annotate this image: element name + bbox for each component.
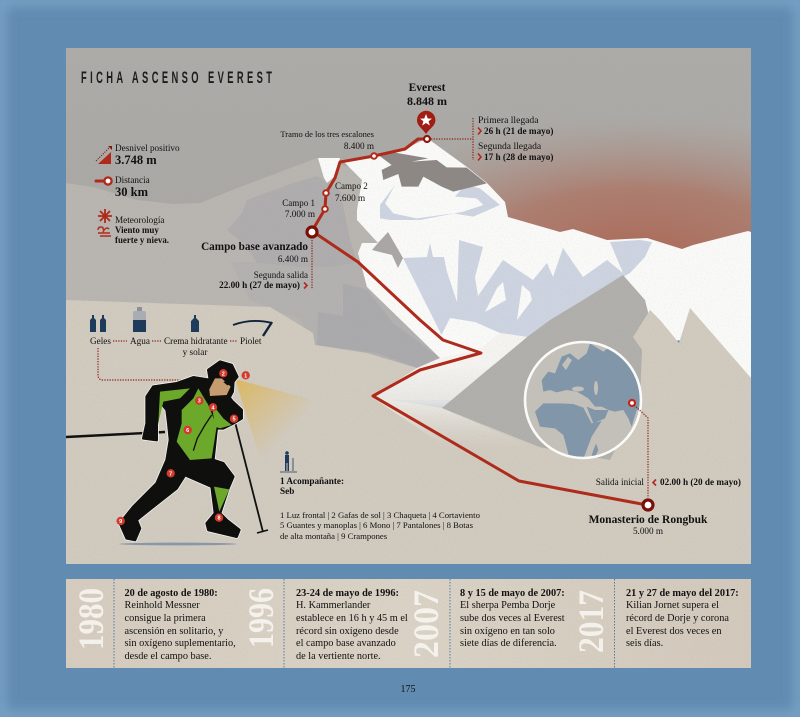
runner: [66, 362, 268, 545]
sky red glow: [462, 133, 751, 249]
entry: 2007: El sherpa Pemba Dorje: [460, 600, 556, 611]
page number: 175: [400, 684, 416, 695]
entry: 1996: H. Kammerlander: [296, 600, 371, 611]
entry: 2007: sube dos veces al Everest: [460, 613, 565, 624]
stat: distancia: 30 km: [115, 185, 149, 199]
entry: 1996: establece en 16 h y 45 m el: [296, 613, 408, 624]
entry: 2007: sin oxígeno en tan solo: [460, 626, 555, 637]
headlamp beam: [235, 379, 313, 467]
numbered markers: [116, 369, 250, 525]
rock between snow: [372, 232, 403, 268]
entry: 2017: 21 y 27 de mayo del 2017:: [626, 588, 739, 599]
stat: desnivel positivo: 3.748 m: [115, 153, 157, 167]
entry: 2017: récord de Dorje y corona: [626, 613, 729, 624]
icon: piolet: [233, 321, 272, 336]
runner shadow: [119, 543, 237, 545]
stat: meteorologia: [98, 209, 169, 245]
equipment list: Piolet: [240, 336, 262, 346]
label: Campo 1: 7.000 m: [285, 209, 315, 219]
numbered markers: 2: [222, 371, 225, 377]
entry: 1980: 20 de agosto de 1980:: [124, 588, 218, 599]
callout: llegadas: [431, 115, 553, 162]
icon: agua: [133, 307, 146, 332]
texture: [320, 141, 751, 426]
far ridge: [66, 158, 500, 400]
icon: acompanante: [280, 451, 297, 472]
label: acompanante: 1 Acompañante:: [280, 476, 344, 486]
label: tres escalones: [280, 129, 374, 151]
entry: 1996: el campo base avanzado: [296, 638, 396, 649]
equipment legend: 1 Luz frontal | 2 Gafas de sol | 3 Chaqueta | 4 Cortaviento: [280, 510, 481, 520]
label: Rongbuk: Monasterio de Rongbuk: [589, 514, 708, 526]
label: Campo base avanzado: Segunda salida: [254, 270, 308, 280]
label: Campo 1: [282, 198, 315, 219]
year: 2017: 2017: [571, 590, 611, 653]
year: 1980: 1980: [71, 588, 111, 650]
icon: snow and wind: [98, 209, 112, 236]
marker: campo base: [307, 227, 317, 237]
land: [535, 342, 647, 460]
face: [209, 378, 231, 396]
callout: salida inicial: 02.00 h (20 de mayo): [660, 477, 741, 487]
entry: 2007: siete días de diferencia.: [460, 638, 557, 649]
title: FICHA ASCENSO EVEREST: [81, 68, 275, 87]
summit dark rock: [378, 153, 487, 192]
entry: 1996: de la vertiente norte.: [296, 651, 381, 662]
right grey mountain: [442, 275, 650, 473]
numbered markers: 8: [217, 516, 221, 522]
stat: distancia: Distancia: [115, 175, 150, 185]
entry: 2007: [460, 588, 565, 649]
callout: salida inicial: [596, 477, 741, 487]
label: Campo 1: Campo 1: [282, 198, 315, 208]
label: Campo 2: [335, 181, 368, 203]
body: [120, 362, 242, 540]
label: Campo base avanzado: Campo base avanzado: [201, 241, 308, 253]
jacket: [158, 388, 232, 512]
snow fading into valley: [373, 333, 527, 435]
numbered markers: 5: [232, 417, 236, 423]
entry: 2017: el Everest dos veces en: [626, 626, 722, 637]
entry: 2017: seis días.: [626, 638, 663, 649]
mid mountain shadow: upper: [227, 176, 357, 267]
entry: 1980: Reinhold Messner: [124, 600, 200, 611]
stat: desnivel positivo: [96, 143, 180, 167]
sky: [66, 48, 751, 248]
callout: llegadas: 26 h (21 de mayo): [484, 126, 553, 136]
label: Campo base avanzado: 6.400 m: [278, 254, 308, 264]
equipment list: y solar: [183, 347, 207, 357]
camp marker: Campo 1: [322, 206, 328, 212]
callout: llegadas: Segunda llegada: [478, 141, 542, 152]
label: acompanante: [280, 476, 344, 496]
numbered markers: 1: [244, 373, 247, 379]
equipment list: Crema hidratante: [164, 336, 228, 346]
equipment legend: [280, 510, 481, 541]
pole: rear: [66, 432, 165, 437]
panel: timeline: [66, 579, 751, 668]
callout: llegadas: Primera llegada: [478, 115, 539, 126]
icon: summit pin: [417, 111, 435, 134]
camp marker: Campo 2: [323, 190, 329, 196]
numbered markers: 7: [169, 471, 172, 477]
globe: [525, 342, 648, 498]
label: Everest: [407, 82, 447, 108]
equipment legend: de alta montaña | 9 Crampones: [280, 531, 388, 541]
icon: geles: [90, 315, 106, 332]
entry: 1980: ascensión en solitario, y: [124, 626, 224, 637]
marker: Rongbuk: [643, 500, 653, 510]
year: 2007: 2007: [406, 590, 446, 658]
entry: 2017: [626, 588, 739, 649]
numbered markers: 4: [211, 405, 215, 411]
callout: llegadas: 17 h (28 de mayo): [484, 152, 553, 162]
stat: meteorologia: Viento muy: [115, 225, 159, 235]
entry: 1980: desde el campo base.: [124, 651, 211, 662]
marker: tres escalones: [371, 153, 377, 159]
route line: [307, 136, 653, 510]
equipment list: Agua: [130, 336, 150, 346]
label: Rongbuk: [589, 514, 708, 536]
entry: 2017: Kilian Jornet supera el: [626, 600, 719, 611]
entry: 1996: récord sin oxígeno desde: [296, 626, 399, 637]
snow field: [318, 138, 751, 380]
label: Campo 2: 7.600 m: [335, 193, 365, 203]
marker: cumbre: [424, 136, 430, 142]
numbered markers: 9: [119, 519, 122, 525]
pole: front: [235, 422, 268, 533]
label: tres escalones: Tramo de los tres escalones: [280, 129, 374, 139]
entry: 1980: sin oxígeno suplementario,: [124, 638, 236, 649]
icon: slope: [96, 146, 112, 164]
entry: 2007: 8 y 15 de mayo de 2007:: [460, 588, 565, 599]
label: acompanante: Seb: [280, 486, 294, 496]
ground: [66, 300, 751, 564]
label: Campo base avanzado: [201, 240, 312, 290]
equipment legend: 5 Guantes y manoplas | 6 Mono | 7 Pantalones | 8 Botas: [280, 520, 474, 530]
icon: crema: [191, 315, 199, 332]
snow shadows: [380, 185, 652, 350]
label: Everest: 8.848 m: [407, 94, 447, 108]
Everest location marker: [629, 400, 635, 406]
entry: 1980: [124, 588, 236, 662]
callout: salida inicial: Salida inicial: [596, 477, 644, 487]
label: Campo 2: Campo 2: [335, 181, 368, 191]
entry: 1996: [296, 588, 408, 662]
equipment list: Geles: [90, 336, 111, 346]
label: tres escalones: 8.400 m: [344, 141, 374, 151]
stat: distancia: [96, 175, 150, 199]
stat: desnivel positivo: Desnivel positivo: [115, 143, 180, 153]
stat: meteorologia: Meteorología: [115, 215, 164, 225]
panel: mountain illustration: [66, 48, 751, 564]
label: Everest: Everest: [409, 82, 446, 94]
numbered markers: 6: [186, 428, 189, 434]
stat: meteorologia: fuerte y nieva.: [115, 235, 169, 245]
label: Campo base avanzado: 22.00 h (27 de mayo): [219, 280, 300, 290]
year: 1996: 1996: [241, 588, 281, 648]
label: Rongbuk: 5.000 m: [633, 526, 663, 536]
numbered markers: 3: [198, 399, 201, 405]
lower slope: [230, 262, 440, 368]
mid mountain shadow: lower: [317, 283, 440, 368]
entry: 1980: consigue la primera: [124, 613, 206, 624]
entry: 1996: 23-24 de mayo de 1996:: [296, 588, 399, 599]
equipment list: [90, 307, 272, 380]
icon: route: [96, 177, 112, 185]
